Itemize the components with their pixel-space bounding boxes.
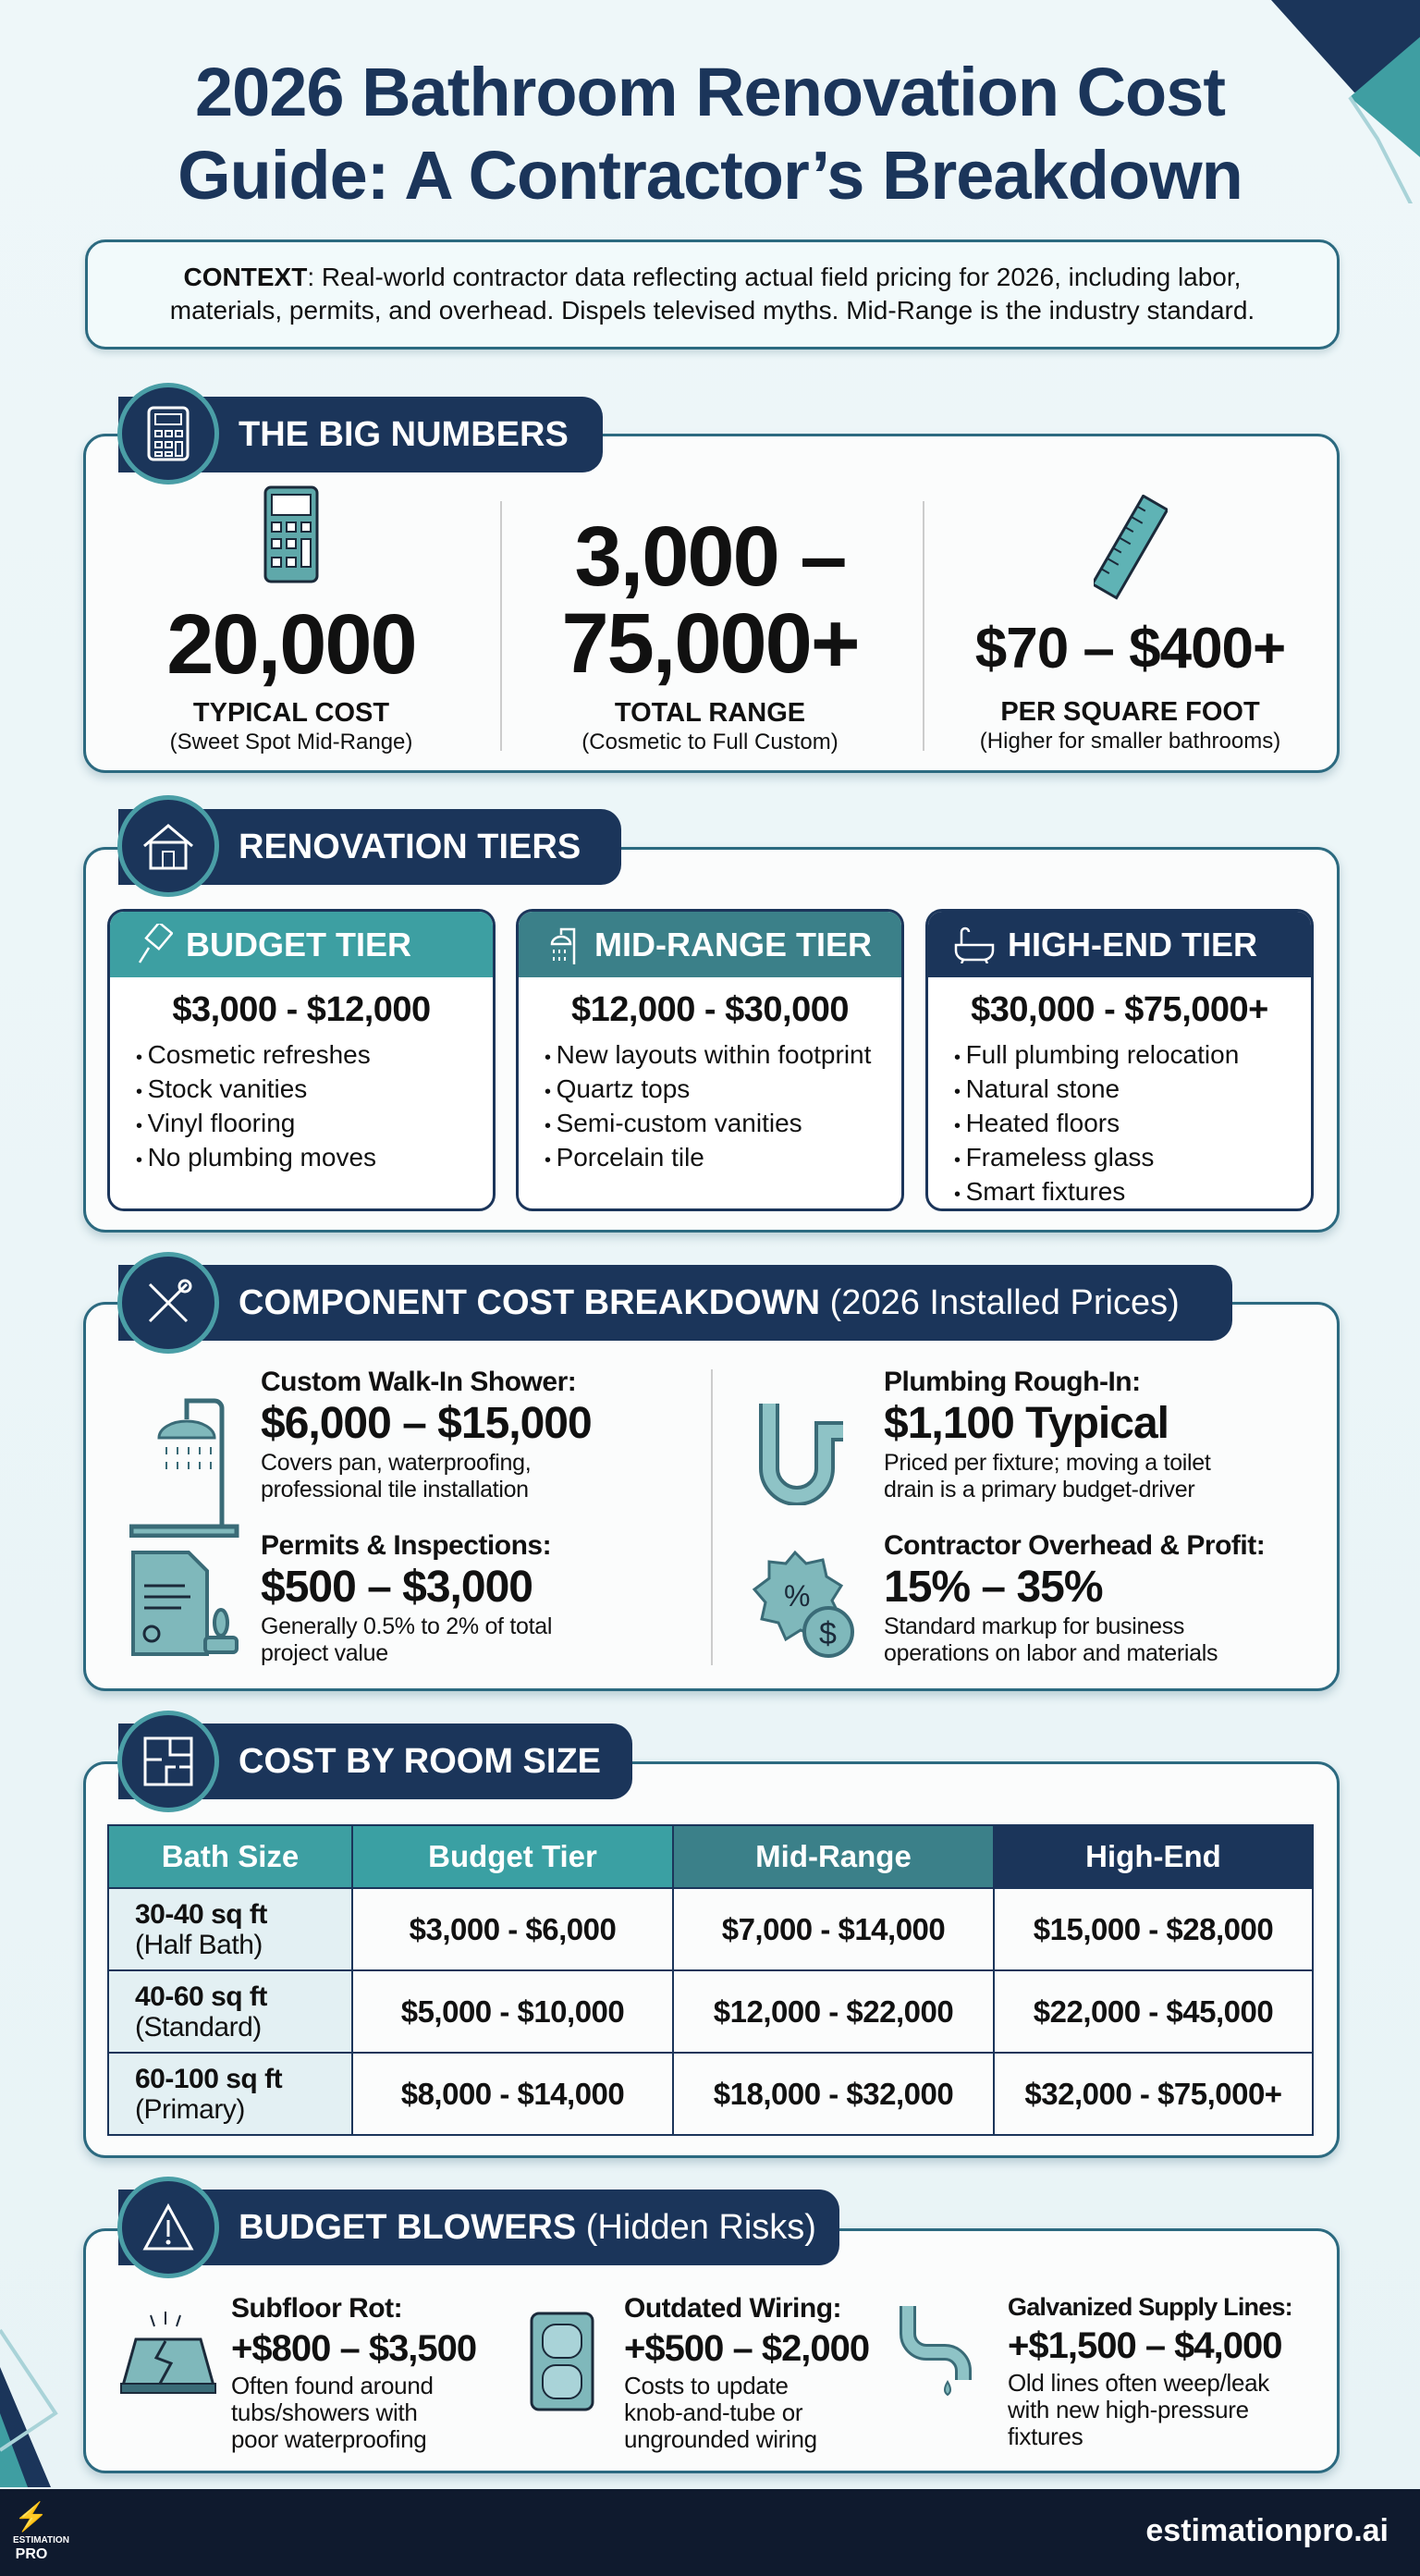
card: budget tier: Vinyl flooring bbox=[148, 1109, 295, 1137]
item: walk-in shower: professional tile installation bbox=[261, 1477, 529, 1503]
card: budget tier: No plumbing moves bbox=[148, 1143, 376, 1171]
title: 2026 Bathroom Renovation Cost bbox=[195, 54, 1225, 130]
card: budget tier bbox=[107, 909, 496, 1211]
stat: per square foot bbox=[975, 495, 1285, 754]
item: overhead & profit: Contractor Overhead & Profit: bbox=[884, 1530, 1265, 1561]
item: outdated wiring bbox=[531, 2293, 869, 2453]
item: galvanized supply lines bbox=[900, 2293, 1292, 2450]
item: walk-in shower: $6,000 – $15,000 bbox=[261, 1399, 592, 1448]
decoration: bottom left bbox=[0, 2329, 58, 2487]
icon: warning bbox=[117, 2177, 219, 2278]
item: plumbing rough-in: Plumbing Rough-In: bbox=[884, 1367, 1141, 1397]
context box bbox=[85, 239, 1340, 350]
title: Guide: A Contractor’s Breakdown bbox=[178, 137, 1242, 214]
icon: p-trap pipe bbox=[759, 1404, 843, 1505]
heading: renovation tiers bbox=[118, 809, 621, 885]
item: outdated wiring: ungrounded wiring bbox=[624, 2425, 817, 2453]
stat: per square foot: PER SQUARE FOOT bbox=[1000, 697, 1260, 727]
context box: CONTEXT: Real-world contractor data reflecting actual field pricing for 2026, including labor, bbox=[184, 263, 1241, 291]
item: galvanized supply lines: Galvanized Supply Lines: bbox=[1008, 2293, 1292, 2321]
panel: renovation tiers bbox=[83, 847, 1340, 1233]
table: cost by room size bbox=[107, 1824, 1314, 2136]
item: overhead & profit: 15% – 35% bbox=[884, 1563, 1103, 1612]
icon: house bbox=[117, 795, 219, 897]
card: high-end tier: Smart fixtures bbox=[966, 1177, 1125, 1206]
card: high-end tier: HIGH-END TIER bbox=[1008, 926, 1257, 963]
table: cost by room size: High-End bbox=[1085, 1839, 1221, 1873]
icon: shower bbox=[129, 1398, 239, 1538]
footer bbox=[0, 2489, 1420, 2576]
card: mid-range tier: Quartz tops bbox=[557, 1074, 690, 1103]
icon: ruler bbox=[1094, 495, 1168, 600]
table: cost by room size: 30-40 sq ft bbox=[135, 1899, 267, 1929]
card: high-end tier: Heated floors bbox=[966, 1109, 1120, 1137]
item: plumbing rough-in: $1,100 Typical bbox=[884, 1399, 1169, 1448]
icon: leaking pipe bbox=[900, 2306, 972, 2397]
panel: big numbers bbox=[83, 434, 1340, 773]
card: mid-range tier: Porcelain tile bbox=[557, 1143, 704, 1171]
card: mid-range tier: Semi-custom vanities bbox=[557, 1109, 802, 1137]
item: galvanized supply lines: +$1,500 – $4,000 bbox=[1008, 2325, 1282, 2366]
item: permits: project value bbox=[261, 1640, 388, 1666]
table: cost by room size: $18,000 - $32,000 bbox=[714, 2077, 953, 2110]
item: permits: Generally 0.5% to 2% of total bbox=[261, 1613, 552, 1639]
stat: total range bbox=[561, 509, 859, 754]
stat: typical cost bbox=[166, 486, 416, 754]
item: outdated wiring: +$500 – $2,000 bbox=[624, 2328, 869, 2369]
card: mid-range tier: $12,000 - $30,000 bbox=[571, 990, 849, 1029]
icon: tools bbox=[117, 1252, 219, 1354]
heading: budget blowers: BUDGET BLOWERS (Hidden Risks) bbox=[239, 2208, 816, 2247]
table: cost by room size: $15,000 - $28,000 bbox=[1034, 1912, 1273, 1945]
item: subfloor rot: Often found around bbox=[231, 2372, 434, 2399]
context box: materials, permits, and overhead. Dispels televised myths. Mid-Range is the industry standard. bbox=[170, 296, 1255, 325]
card: budget tier: Cosmetic refreshes bbox=[148, 1040, 371, 1069]
table: cost by room size: $12,000 - $22,000 bbox=[714, 1993, 953, 2029]
item: outdated wiring: Costs to update bbox=[624, 2372, 789, 2399]
stat: total range: TOTAL RANGE bbox=[615, 698, 805, 728]
logo: PRO bbox=[16, 2546, 47, 2562]
icon: calculator header bbox=[117, 383, 219, 485]
item: subfloor rot: poor waterproofing bbox=[231, 2425, 426, 2453]
table: cost by room size: (Primary) bbox=[135, 2093, 245, 2125]
card: high-end tier: Natural stone bbox=[966, 1074, 1120, 1103]
heading: component cost breakdown: COMPONENT COST BREAKDOWN (2026 Installed Prices) bbox=[239, 1283, 1180, 1322]
stat: typical cost: 20,000 bbox=[166, 597, 416, 692]
card: mid-range tier: MID-RANGE TIER bbox=[594, 926, 872, 963]
item: subfloor rot: Subfloor Rot: bbox=[231, 2293, 402, 2324]
heading: renovation tiers: RENOVATION TIERS bbox=[239, 828, 581, 866]
item: overhead & profit: operations on labor and materials bbox=[884, 1640, 1218, 1666]
panel: cost by room size bbox=[83, 1761, 1340, 2158]
item: plumbing rough-in: Priced per fixture; moving a toilet bbox=[884, 1450, 1211, 1476]
icon: percent dollar badge: % bbox=[784, 1579, 810, 1613]
item: overhead & profit: Standard markup for business bbox=[884, 1613, 1184, 1639]
table: cost by room size: (Half Bath) bbox=[135, 1929, 263, 1960]
table: cost by room size: $8,000 - $14,000 bbox=[401, 2077, 624, 2110]
stat: total range: (Cosmetic to Full Custom) bbox=[581, 730, 839, 754]
panel: budget blowers bbox=[83, 2228, 1340, 2473]
title bbox=[178, 54, 1242, 214]
item: walk-in shower: Custom Walk-In Shower: bbox=[261, 1367, 576, 1397]
icon: outlet bbox=[531, 2312, 594, 2411]
stat: typical cost: TYPICAL COST bbox=[193, 698, 389, 728]
table: cost by room size: 40-60 sq ft bbox=[135, 1981, 267, 2012]
table: cost by room size: Mid-Range bbox=[755, 1839, 912, 1873]
icon: floor plan bbox=[117, 1711, 219, 1812]
card: budget tier: Stock vanities bbox=[148, 1074, 307, 1103]
card: high-end tier: $30,000 - $75,000+ bbox=[971, 990, 1268, 1029]
item: walk-in shower: Covers pan, waterproofing, bbox=[261, 1450, 531, 1476]
item: plumbing rough-in: drain is a primary budget-driver bbox=[884, 1477, 1194, 1503]
item: walk-in shower bbox=[129, 1367, 592, 1538]
heading: big numbers: THE BIG NUMBERS bbox=[239, 415, 569, 454]
icon: permit document bbox=[131, 1551, 239, 1656]
url: estimationpro.ai bbox=[1145, 2513, 1389, 2548]
item: galvanized supply lines: fixtures bbox=[1008, 2423, 1083, 2450]
item: plumbing rough-in bbox=[759, 1367, 1211, 1505]
card: high-end tier: Frameless glass bbox=[966, 1143, 1154, 1171]
stat: typical cost: (Sweet Spot Mid-Range) bbox=[170, 730, 412, 754]
item: overhead & profit bbox=[753, 1530, 1265, 1666]
icon: cracked floor bbox=[120, 2312, 216, 2394]
item: permits: $500 – $3,000 bbox=[261, 1563, 532, 1612]
table: cost by room size: $3,000 - $6,000 bbox=[410, 1912, 616, 1945]
icon: percent dollar badge bbox=[753, 1550, 854, 1658]
item: subfloor rot bbox=[120, 2293, 476, 2453]
card: mid-range tier bbox=[516, 909, 904, 1211]
stat: total range: 75,000+ bbox=[561, 596, 859, 691]
decoration: top right bbox=[1271, 0, 1420, 203]
table: cost by room size: $7,000 - $14,000 bbox=[722, 1912, 945, 1945]
item: outdated wiring: Outdated Wiring: bbox=[624, 2293, 841, 2324]
item: outdated wiring: knob-and-tube or bbox=[624, 2398, 802, 2426]
table: cost by room size: $5,000 - $10,000 bbox=[401, 1993, 624, 2029]
stat: total range: 3,000 – bbox=[575, 509, 845, 604]
panel: component cost breakdown bbox=[83, 1302, 1340, 1691]
card: high-end tier bbox=[925, 909, 1314, 1211]
item: subfloor rot: +$800 – $3,500 bbox=[231, 2328, 476, 2369]
stat: per square foot: (Higher for smaller bathrooms) bbox=[980, 729, 1280, 754]
heading: cost by room size bbox=[118, 1723, 632, 1799]
heading: cost by room size: COST BY ROOM SIZE bbox=[239, 1742, 601, 1781]
icon: calculator bbox=[264, 486, 318, 583]
item: permits: Permits & Inspections: bbox=[261, 1530, 551, 1561]
card: mid-range tier: New layouts within footprint bbox=[557, 1040, 871, 1069]
heading: big numbers bbox=[118, 397, 603, 472]
logo bbox=[13, 2501, 69, 2562]
stat: per square foot: $70 – $400+ bbox=[975, 617, 1285, 681]
table: cost by room size: Bath Size bbox=[162, 1839, 299, 1873]
icon: percent dollar badge: $ bbox=[819, 1616, 837, 1651]
item: galvanized supply lines: Old lines often weep/leak bbox=[1008, 2369, 1269, 2397]
table: cost by room size: $22,000 - $45,000 bbox=[1034, 1993, 1273, 2029]
item: permits bbox=[131, 1530, 552, 1666]
logo: ⚡ bbox=[14, 2502, 49, 2533]
card: budget tier: BUDGET TIER bbox=[186, 926, 411, 963]
logo: ESTIMATION bbox=[13, 2535, 69, 2545]
item: galvanized supply lines: with new high-pressure bbox=[1008, 2396, 1249, 2423]
heading: budget blowers bbox=[118, 2190, 839, 2265]
table: cost by room size: 60-100 sq ft bbox=[135, 2064, 282, 2093]
card: budget tier: $3,000 - $12,000 bbox=[172, 990, 431, 1029]
table: cost by room size: $32,000 - $75,000+ bbox=[1024, 2077, 1282, 2110]
item: subfloor rot: tubs/showers with bbox=[231, 2398, 418, 2426]
card: high-end tier: Full plumbing relocation bbox=[966, 1040, 1239, 1069]
table: cost by room size: Budget Tier bbox=[428, 1839, 597, 1873]
table: cost by room size: (Standard) bbox=[135, 2012, 262, 2042]
heading: component cost breakdown bbox=[118, 1265, 1232, 1341]
